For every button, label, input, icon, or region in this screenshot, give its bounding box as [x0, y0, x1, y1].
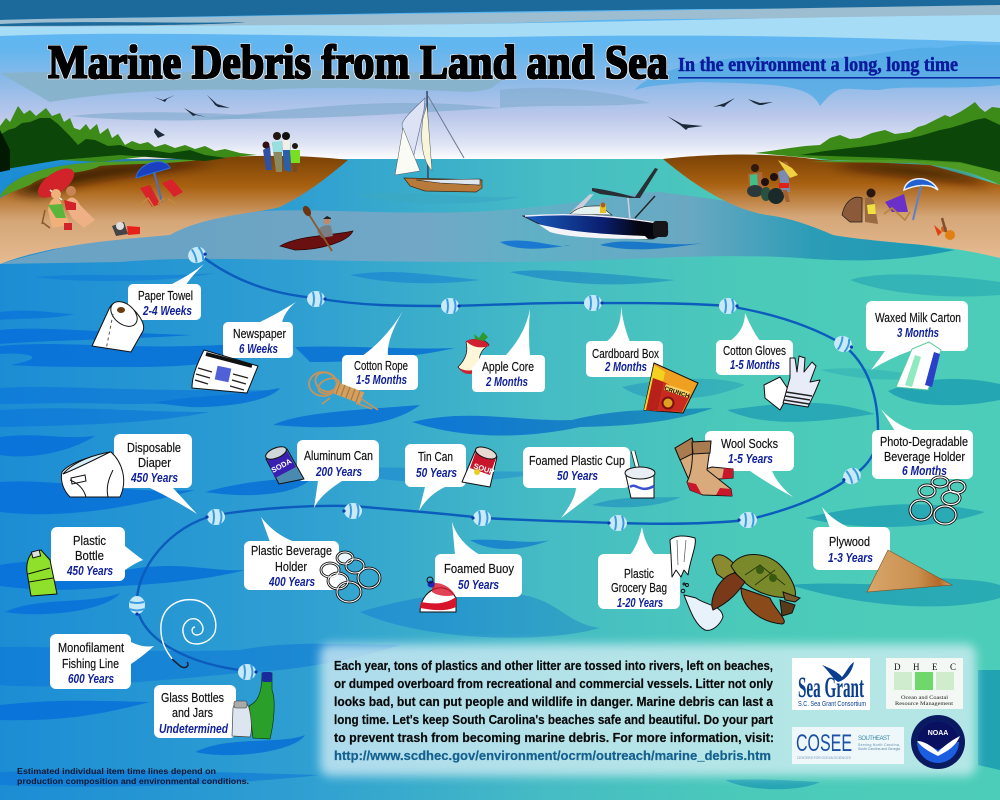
panel: information	[320, 644, 976, 776]
callout: aluminum can: Aluminum Can	[304, 448, 373, 463]
callout: glass bottles and jars: Glass Bottles	[161, 690, 224, 705]
icon: newspaper	[192, 350, 258, 393]
callout: plastic beverage holder: Plastic Beverage	[251, 543, 332, 558]
callout: glass bottles and jars	[154, 685, 236, 738]
callout: cotton rope: Cotton Rope	[354, 358, 408, 373]
icon: milk carton	[896, 342, 941, 390]
buoys	[129, 244, 864, 680]
callout: disposable diaper	[114, 434, 197, 514]
icon: soda can: SODA	[270, 456, 294, 475]
callout: monofilament fishing line: 600 Years	[68, 671, 114, 686]
callout: tin can: 50 Years	[416, 465, 457, 480]
icon: six-pack rings left	[321, 552, 380, 602]
callout: foamed plastic cup: Foamed Plastic Cup	[529, 453, 625, 468]
callout: disposable diaper: 450 Years	[130, 470, 178, 485]
icon: cereal box: CRUNCH	[663, 386, 690, 400]
callout: cardboard box: Cardboard Box	[592, 346, 659, 361]
callout: plywood: 1-3 Years	[828, 550, 873, 565]
family group on left beach	[262, 132, 300, 172]
icon: cotton rope	[309, 369, 378, 410]
callout: monofilament fishing line: Fishing Line	[62, 656, 119, 671]
logo: NOAA	[911, 715, 965, 769]
icon: paper towel roll	[92, 297, 144, 352]
callout: cotton gloves: 1-5 Months	[730, 357, 780, 372]
paragraph text: long time. Let's keep South Carolina's beaches safe and beautiful. Do your part	[334, 713, 774, 727]
callout: apple core: Apple Core	[482, 359, 534, 374]
purple chair and blue umbrella	[884, 179, 938, 220]
callout: foamed plastic cup	[523, 447, 630, 518]
callout: plastic bottle: 450 Years	[66, 563, 113, 578]
waves	[0, 193, 1000, 789]
child with toys on right beach	[934, 218, 955, 240]
callout: photo-degradable beverage holder: Photo-Degradable	[880, 434, 968, 449]
callout: photo-degradable beverage holder	[872, 409, 973, 479]
beachgoers with red umbrella	[33, 163, 95, 230]
callout: paper towel	[128, 264, 204, 320]
sailboat	[395, 91, 482, 192]
logo: COSEE	[792, 727, 904, 764]
paragraph text: Each year, tons of plastics and other litter are tossed into rivers, left on beaches,	[334, 659, 773, 673]
blue beach umbrella with red chairs	[136, 162, 183, 209]
logo: COSEE: CENTERS FOR OCEAN SCIENCES	[797, 756, 852, 760]
callout: cotton rope: 1-5 Months	[356, 372, 407, 387]
icon: fishing bobber	[420, 577, 456, 612]
icon: cotton gloves	[764, 356, 820, 410]
callout: foamed buoy: 50 Years	[458, 577, 499, 592]
callout: plastic beverage holder: Holder	[275, 559, 308, 574]
callout: monofilament fishing line	[50, 634, 154, 689]
callout: glass bottles and jars: and Jars	[172, 705, 213, 720]
callout: foamed plastic cup: 50 Years	[557, 468, 598, 483]
callout: cardboard box: 2 Months	[604, 359, 647, 374]
callout: foamed buoy	[435, 522, 522, 597]
icon: foamed cup	[625, 451, 655, 498]
callout: cotton gloves	[716, 313, 793, 375]
paragraph text: or dumped overboard from recreational and commercial vessels. Litter not only	[334, 677, 773, 691]
icon: soup can	[462, 445, 498, 487]
logo: DHEC: Ocean and Coastal	[901, 695, 949, 701]
callout: photo-degradable beverage holder: 6 Months	[902, 463, 947, 478]
icon: fishing line and hook	[161, 600, 216, 667]
callout: tin can	[405, 444, 466, 511]
callout: plastic bottle	[51, 527, 143, 581]
icon: six-pack rings right	[910, 477, 965, 524]
right grass	[810, 159, 1000, 185]
left beach	[0, 106, 348, 264]
callout: cotton rope	[342, 311, 418, 390]
callout: apple core: 2 Months	[485, 374, 528, 389]
callout: newspaper: 6 Weeks	[239, 341, 278, 356]
callout: waxed milk carton: Waxed Milk Carton	[875, 310, 961, 325]
icon: plastic bottle	[27, 550, 57, 596]
callout: paper towel: 2-4 Weeks	[142, 303, 192, 318]
callout: plastic grocery bag: Plastic	[624, 566, 654, 581]
paragraph text	[334, 659, 774, 763]
sky background	[0, 0, 1000, 160]
paragraph text: to prevent trash from becoming marine debris. For more information, visit:	[334, 731, 774, 745]
logo: COSEE: COSEE	[796, 730, 852, 757]
icon: wool socks	[675, 438, 733, 496]
callout: paper towel: Paper Towel	[138, 288, 193, 303]
callout: newspaper: Newspaper	[233, 326, 287, 341]
logo: COSEE: SOUTHEAST	[858, 736, 890, 742]
callout: cotton gloves: Cotton Gloves	[723, 343, 786, 358]
callout: disposable diaper: Diaper	[138, 455, 172, 470]
logo: NOAA: NOAA	[928, 730, 948, 737]
callout: plastic beverage holder	[244, 517, 339, 590]
icon: soda can	[264, 444, 304, 484]
paragraph text: looks bad, but can put people and wildlife in danger. Marine debris can last a	[334, 695, 774, 709]
callout: plastic bottle: Plastic	[73, 533, 107, 548]
logo: DHEC: D H E C	[894, 662, 956, 672]
icon: plastic bags with bubbles	[670, 536, 723, 630]
callout: plastic grocery bag	[598, 527, 680, 610]
icon: glass bottle and jar	[232, 672, 274, 739]
callout: aluminum can: 200 Years	[315, 464, 362, 479]
icon: cereal box	[644, 363, 698, 413]
icon: apple core	[458, 332, 489, 374]
logo: DHEC	[886, 658, 963, 709]
icon: soup can: SOUP	[472, 461, 495, 476]
footnote: Estimated individual item time lines depend on	[17, 766, 216, 776]
callout: plastic bottle: Bottle	[75, 548, 104, 563]
subtitle: In the environment a long, long time	[678, 54, 958, 76]
paragraph text: http://www.scdhec.gov/environment/ocrm/outreach/marine_debris.htm	[334, 749, 771, 763]
callout: foamed buoy: Foamed Buoy	[444, 561, 515, 576]
callout: cardboard box	[586, 306, 663, 377]
kayak with paddler	[280, 204, 353, 251]
callout: glass bottles and jars: Undetermined	[159, 721, 229, 736]
callout: apple core	[472, 309, 545, 392]
left tree line	[0, 106, 257, 170]
birds	[154, 95, 773, 138]
callout: waxed milk carton: 3 Months	[897, 325, 939, 340]
callout: photo-degradable beverage holder: Beverage Holder	[884, 449, 966, 464]
callout: plywood: Plywood	[829, 534, 870, 549]
callout: wool socks: Wool Socks	[721, 436, 778, 451]
callout: monofilament fishing line: Monofilament	[58, 640, 124, 655]
group with inner tubes on right beach	[747, 160, 798, 204]
callout: plastic grocery bag: 1-20 Years	[617, 595, 663, 610]
logo: COSEE: Serving North Carolina,	[858, 743, 900, 747]
callout: wool socks: 1-5 Years	[728, 451, 773, 466]
logo: Sea Grant: S.C. Sea Grant Consortium	[798, 701, 866, 708]
callout: tin can: Tin Can	[418, 449, 453, 464]
right beach	[663, 102, 1000, 258]
woman with dog on right beach	[842, 188, 878, 224]
logo: Sea Grant	[792, 658, 870, 710]
icon: sea turtle	[712, 554, 800, 624]
callout: plastic grocery bag: Grocery Bag	[611, 580, 667, 595]
callout: plywood	[813, 507, 890, 570]
title: Marine Debris from Land and Sea	[48, 36, 668, 89]
right tree line	[755, 102, 1000, 172]
beach toys	[112, 222, 140, 236]
icon: plywood board	[867, 550, 952, 592]
callout: wool socks	[705, 431, 794, 497]
callout: aluminum can	[297, 440, 379, 508]
callout: disposable diaper: Disposable	[127, 440, 181, 455]
callout: plastic beverage holder: 400 Years	[268, 574, 315, 589]
motorboat	[500, 168, 703, 249]
logo: DHEC: Resource Management	[895, 701, 954, 707]
logo: COSEE: South Carolina and Georgia	[858, 747, 900, 751]
left grass	[0, 159, 205, 197]
logo: Sea Grant: Sea Grant	[798, 671, 864, 704]
footnote	[17, 766, 249, 786]
callout: waxed milk carton	[866, 301, 968, 370]
callout: newspaper	[223, 302, 296, 358]
footnote: production composition and environmental conditions.	[17, 776, 249, 786]
icon: diaper	[61, 452, 124, 497]
rope line	[137, 257, 878, 671]
